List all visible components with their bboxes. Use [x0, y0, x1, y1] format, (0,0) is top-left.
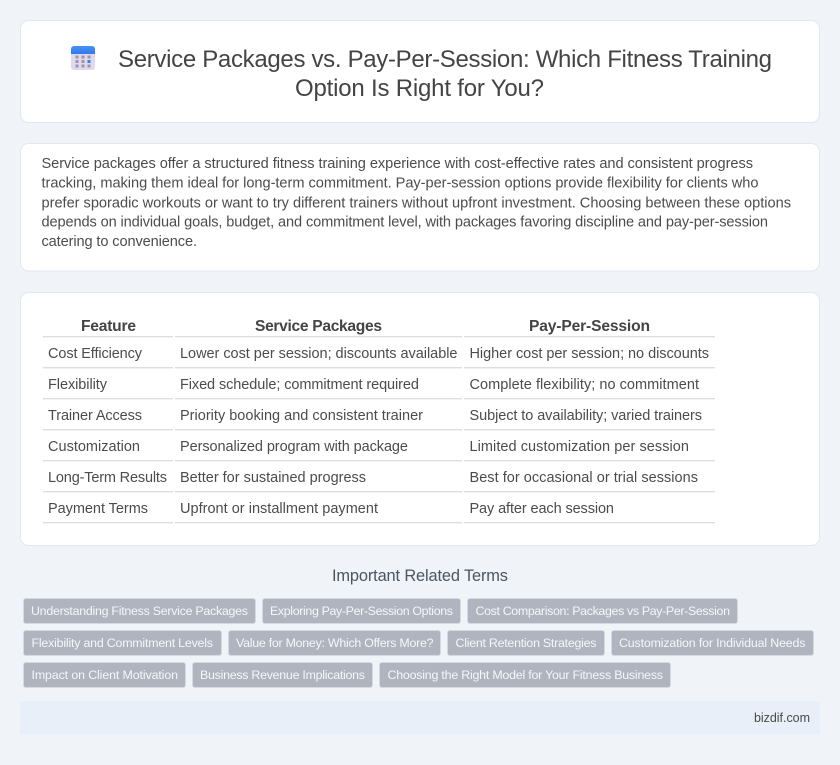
row: cost efficiency: Cost Efficiency [48, 346, 143, 362]
row: cost efficiency: Higher cost per session; no discounts [470, 346, 709, 362]
summary paragraph: prefer sporadic workouts or want to try different trainers without upfront investment. Choosing between these options [42, 196, 791, 212]
icon: calendar [71, 46, 95, 70]
row: flexibility: Flexibility [48, 377, 108, 393]
tag: Flexibility and Commitment Levels [32, 636, 213, 650]
summary paragraph: catering to convenience. [42, 234, 197, 250]
row: long-term results: Long-Term Results [48, 470, 167, 486]
table header row [43, 318, 715, 337]
footer source: bizdif.com [754, 711, 810, 725]
tag: Cost Comparison: Packages vs Pay-Per-Session [476, 604, 730, 618]
row: customization: Personalized program with package [180, 439, 408, 455]
tag: Value for Money: Which Offers More? [236, 636, 434, 650]
title: Service Packages vs. Pay-Per-Session: Which Fitness Training [118, 46, 772, 73]
row: long-term results: Best for occasional or trial sessions [470, 470, 698, 486]
heading: important related terms: Important Related Terms [332, 567, 508, 585]
row: customization [43, 439, 715, 461]
table header row: Service Packages [255, 318, 382, 335]
footer bar [20, 701, 820, 734]
tag: Choosing the Right Model for Your Fitness Business [388, 668, 663, 682]
row: cost efficiency: Lower cost per session; discounts available [180, 346, 458, 362]
tag: Impact on Client Motivation [32, 668, 178, 682]
tag [24, 598, 256, 624]
tag: Client Retention Strategies [456, 636, 596, 650]
tag: Exploring Pay-Per-Session Options [270, 604, 453, 618]
tag: Business Revenue Implications [200, 668, 365, 682]
row: trainer access [43, 408, 715, 430]
tag [24, 662, 186, 688]
row: flexibility: Complete flexibility; no commitment [470, 377, 699, 393]
tag: Understanding Fitness Service Packages [31, 604, 248, 618]
tag: Customization for Individual Needs [619, 636, 806, 650]
row: cost efficiency [43, 346, 715, 368]
row: customization: Customization [48, 439, 140, 455]
row: payment terms: Payment Terms [48, 501, 148, 517]
row: trainer access: Subject to availability; varied trainers [470, 408, 702, 424]
row: trainer access: Trainer Access [48, 408, 142, 424]
row: flexibility [43, 377, 715, 399]
title [118, 46, 772, 102]
summary paragraph: tracking, making them ideal for long-term commitment. Pay-per-session options provide flexibility for clients who [42, 176, 758, 192]
tag [448, 630, 604, 656]
panel: summary text [20, 144, 820, 271]
panel: comparison table [20, 292, 820, 546]
title: Option Is Right for You? [295, 75, 544, 102]
row: long-term results: Better for sustained progress [180, 470, 366, 486]
row: trainer access: Priority booking and consistent trainer [180, 408, 423, 424]
row: payment terms: Upfront or installment payment [180, 501, 378, 517]
table header row: Pay-Per-Session [529, 318, 650, 335]
tag [612, 630, 814, 656]
row: long-term results [43, 470, 715, 492]
row: customization: Limited customization per session [470, 439, 689, 455]
row: payment terms: Pay after each session [470, 501, 614, 517]
tag [24, 630, 222, 656]
summary paragraph [42, 156, 791, 250]
tag [228, 630, 440, 656]
tag [262, 598, 460, 624]
tag [468, 598, 738, 624]
summary paragraph: depends on individual goals, budget, and commitment level, with packages favoring discipline and pay-per-session [42, 214, 768, 230]
row: payment terms [43, 501, 715, 523]
panel: title header [20, 20, 820, 122]
related term tags [24, 598, 814, 688]
table header row: Feature [81, 318, 136, 335]
tag [192, 662, 372, 688]
tag [380, 662, 670, 688]
summary paragraph: Service packages offer a structured fitness training experience with cost-effective rates and consistent progress [42, 156, 753, 172]
row: flexibility: Fixed schedule; commitment required [180, 377, 419, 393]
